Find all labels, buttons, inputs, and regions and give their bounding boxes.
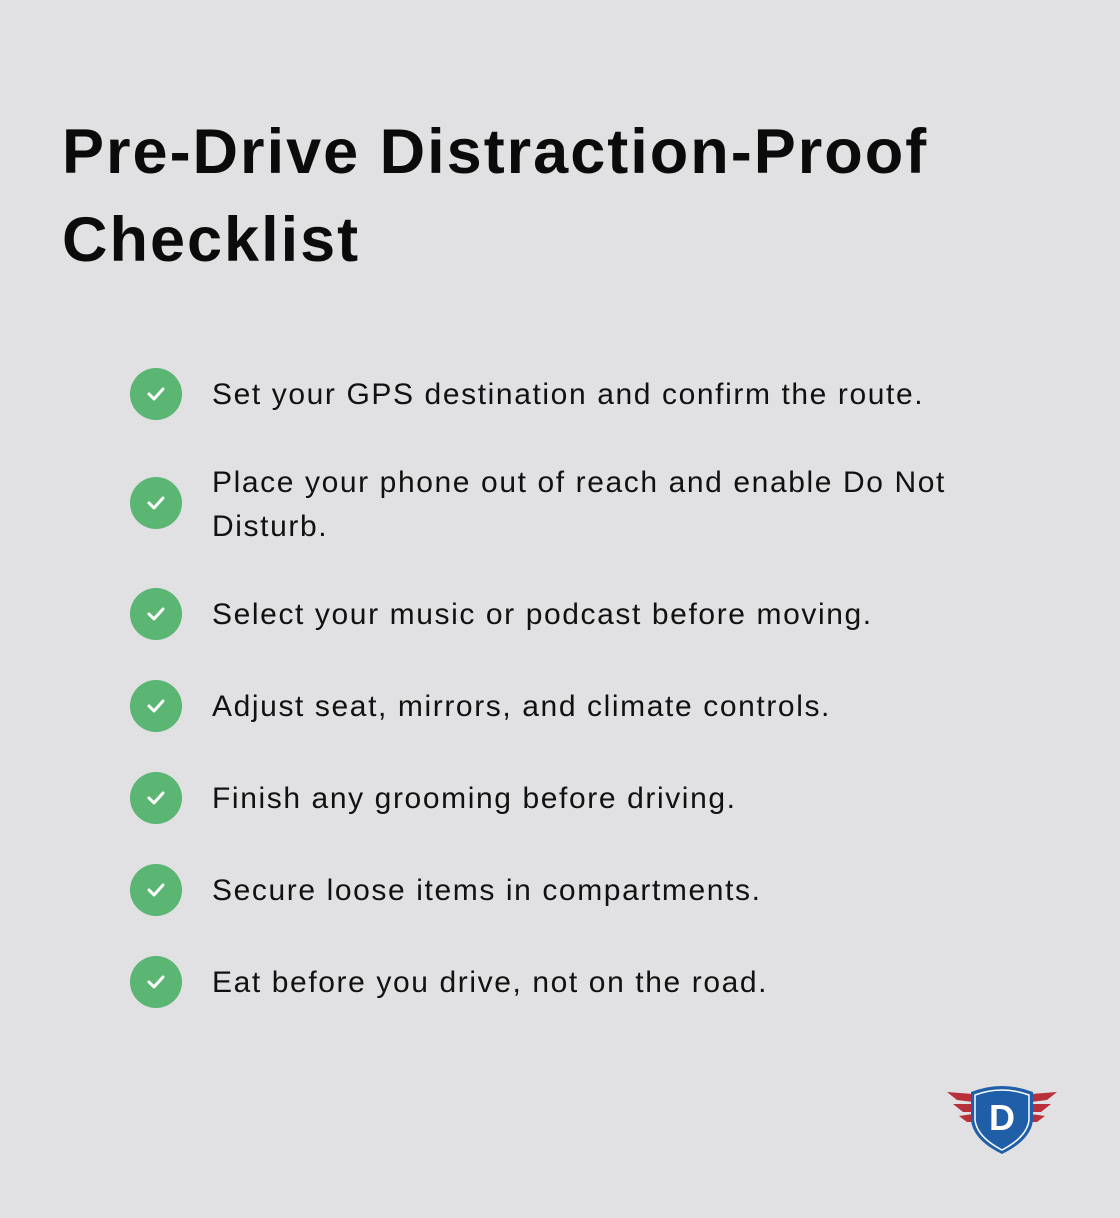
item 6: Secure loose items in compartments. <box>212 874 762 907</box>
item 2: Place your phone out of reach and enable Do Not <box>212 466 946 499</box>
item 1 <box>130 368 924 420</box>
item 3: Select your music or podcast before moving. <box>212 598 873 631</box>
title <box>62 117 928 275</box>
item 7 <box>130 956 768 1008</box>
item 2: Disturb. <box>212 510 328 543</box>
logo <box>947 1086 1057 1154</box>
logo: D <box>989 1097 1015 1138</box>
item 4: Adjust seat, mirrors, and climate controls. <box>212 690 831 723</box>
title: Pre-Drive Distraction-Proof <box>62 117 928 187</box>
item 2 <box>130 466 946 543</box>
item 7: Eat before you drive, not on the road. <box>212 966 768 999</box>
item 6 <box>130 864 762 916</box>
item 3 <box>130 588 873 640</box>
item 1: Set your GPS destination and confirm the route. <box>212 378 924 411</box>
item 5: Finish any grooming before driving. <box>212 782 737 815</box>
title: Checklist <box>62 205 360 275</box>
item 5 <box>130 772 737 824</box>
item 4 <box>130 680 831 732</box>
